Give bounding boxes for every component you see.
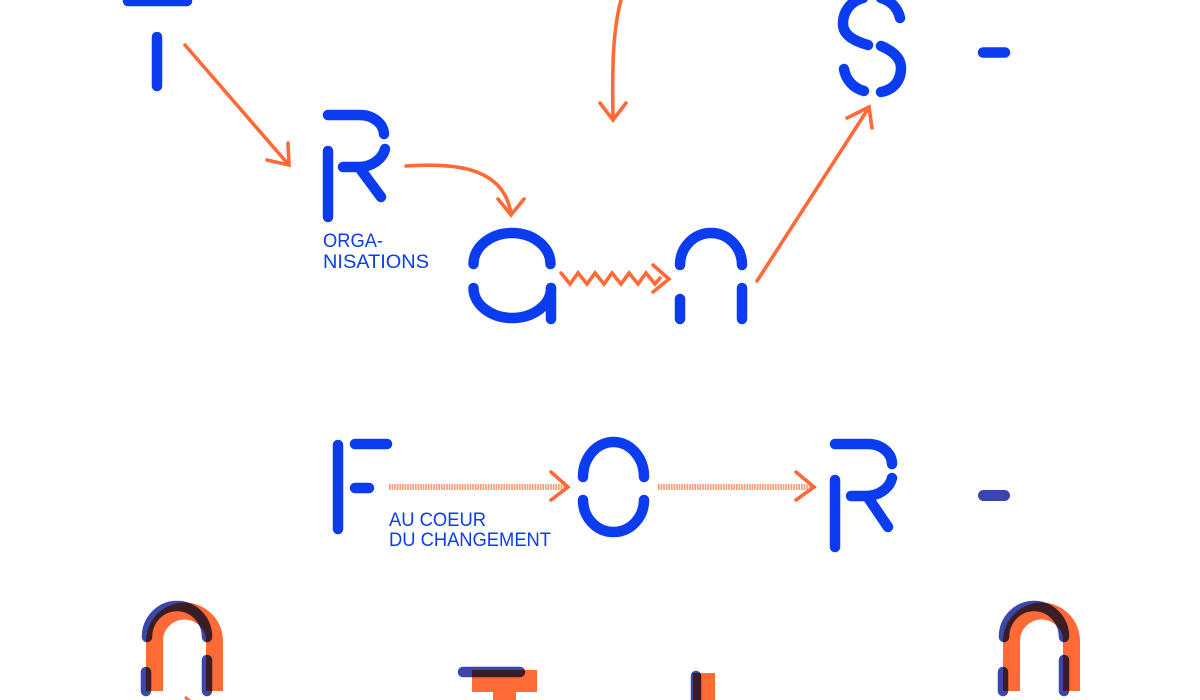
- arrow: R to a: [406, 165, 524, 215]
- letter n, orange and blue overlay (left): [146, 606, 214, 691]
- letter S: [843, 0, 901, 92]
- zigzag arrow: a to n: [561, 265, 669, 292]
- label: organisations: [323, 231, 429, 273]
- letter T, orange and blue overlay: [463, 670, 537, 700]
- letter a: [474, 233, 551, 319]
- dotted arrow: O to R: [658, 472, 814, 500]
- dash (first line): [983, 47, 1005, 58]
- letter n, orange and blue overlay (right): [1003, 606, 1072, 691]
- small orange arrow tip: [185, 697, 191, 700]
- dash (second line): [984, 490, 1004, 501]
- label: au coeur du changement: AU COEUR: [389, 510, 486, 531]
- label: organisations: NISATIONS: [323, 252, 429, 273]
- label: au coeur du changement: DU CHANGEMENT: [389, 530, 551, 551]
- dotted arrow: F to O: [389, 472, 568, 500]
- arrow: n to S: [757, 107, 872, 281]
- label: au coeur du changement: [389, 510, 551, 551]
- letter F: [338, 444, 387, 529]
- letter R (organisations): [328, 115, 385, 217]
- label: organisations: ORGA-: [323, 231, 383, 252]
- letter O: [583, 442, 644, 532]
- letter n: [680, 233, 742, 319]
- letter T (top): [128, 1, 187, 86]
- arrow: from above, downward: [600, 0, 626, 120]
- arrow: T to R: [185, 45, 289, 165]
- letter I, orange and blue overlay: [693, 673, 715, 700]
- letter R (second line): [835, 444, 892, 547]
